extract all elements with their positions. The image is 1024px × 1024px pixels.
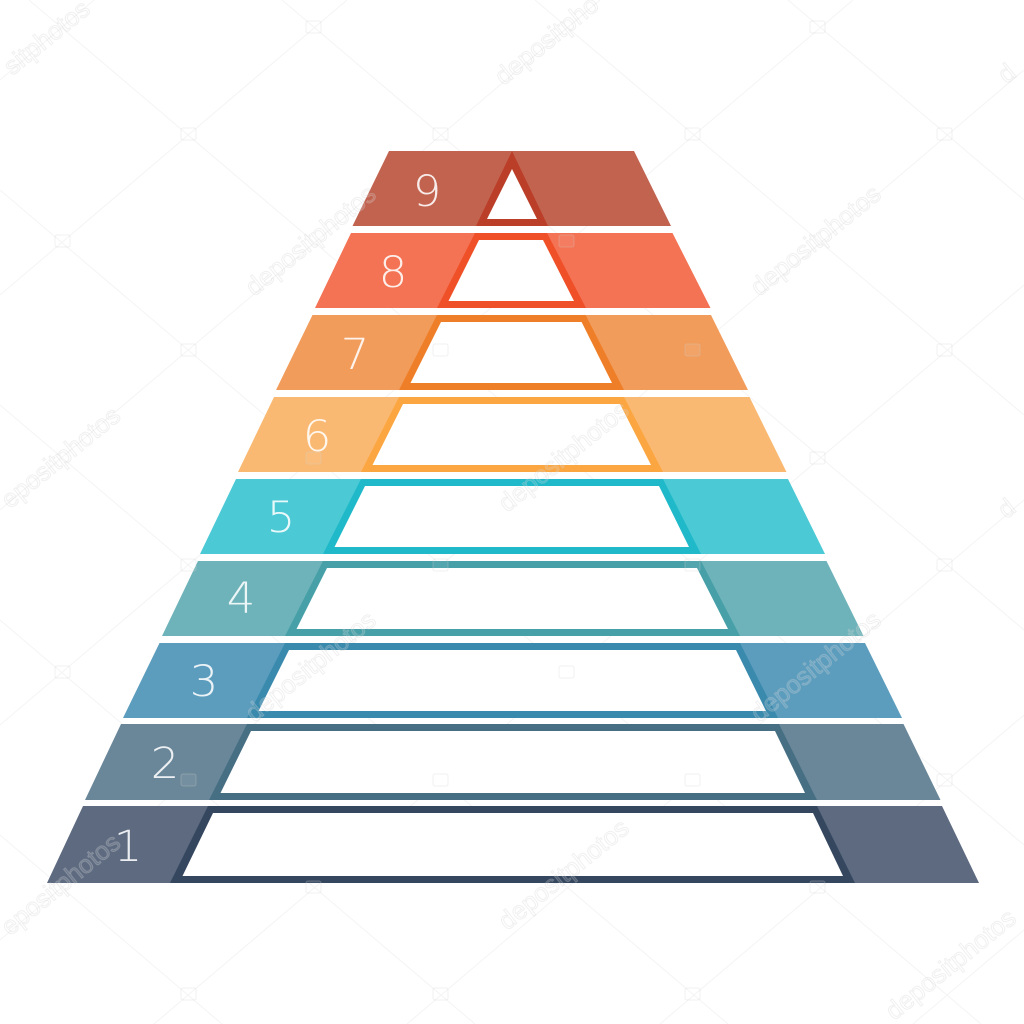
watermark text: d: [993, 493, 1021, 524]
watermark text: depositphotos: [493, 396, 634, 518]
level 7: [276, 315, 748, 390]
watermark text: depositphotos: [745, 606, 886, 728]
watermark text: depositphotos: [880, 904, 1021, 1024]
level 6: [238, 397, 786, 472]
level 4: [162, 561, 864, 636]
watermark text: depositphotos: [745, 180, 886, 302]
level 3: [123, 643, 902, 718]
watermark text: depositphotos: [240, 180, 381, 302]
level 8: [315, 233, 710, 308]
level 2: [85, 724, 940, 800]
number 5: 5: [267, 493, 295, 543]
watermark text: d: [993, 58, 1021, 89]
level 1: [47, 806, 979, 883]
number 1: 1: [114, 822, 142, 872]
number 3: 3: [190, 657, 218, 707]
number 9: 9: [413, 167, 441, 217]
number 4: 4: [227, 574, 255, 624]
watermark text: depositphotos: [493, 814, 634, 936]
watermark text: depositphotos: [240, 606, 381, 728]
level 5: [200, 479, 825, 554]
number 2: 2: [151, 739, 179, 789]
number 8: 8: [379, 248, 407, 298]
number 6: 6: [303, 412, 331, 462]
level 9: [352, 151, 671, 226]
number 7: 7: [341, 330, 369, 380]
